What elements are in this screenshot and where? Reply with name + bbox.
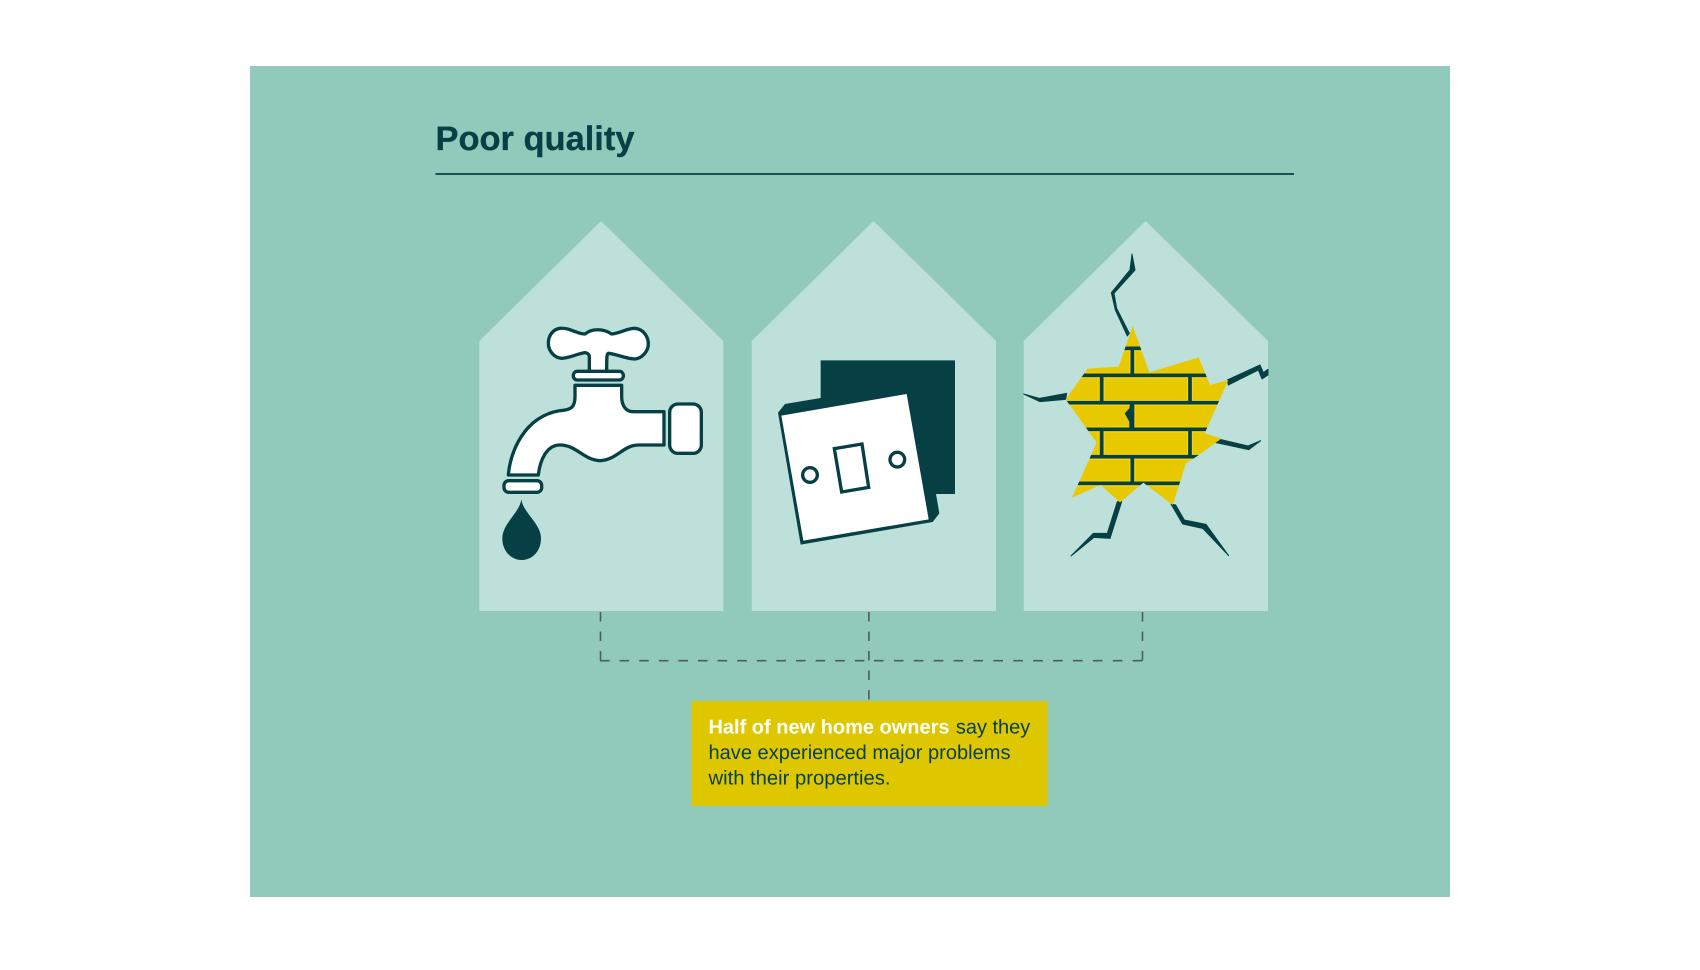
tap handle (548, 328, 648, 373)
tap collar (573, 371, 623, 380)
panel: background (250, 66, 1450, 897)
callout text: have experienced major problems (708, 742, 1010, 764)
switch rocker (834, 444, 869, 492)
icon: dripping tap (502, 328, 701, 560)
right screw (890, 452, 905, 467)
dark wall hole and plate edge (778, 360, 955, 545)
exposed brick area (1060, 323, 1233, 507)
callout text: Half of new home owners (708, 716, 950, 738)
tap body and spout (508, 385, 664, 475)
house shape: cracked wall (1024, 221, 1268, 611)
callout text: say they (956, 716, 1030, 738)
tap end cap (670, 404, 701, 453)
panel: house with loose light switch (752, 221, 996, 611)
spout ring (504, 481, 542, 492)
water drop (502, 499, 541, 560)
callout text (707, 716, 1030, 789)
callout: half of new home owners (692, 701, 1048, 806)
icon: cracked wall with exposed bricks (1024, 254, 1268, 556)
callout text: with their properties. (707, 767, 890, 789)
crack in brick (1125, 403, 1134, 429)
dashed connector lines (600, 612, 1143, 712)
panel: house with cracked wall (1024, 221, 1268, 611)
heading: Poor quality: Poor quality (436, 120, 635, 158)
brick highlights (1066, 350, 1220, 486)
yellow brick fill (1060, 323, 1233, 507)
switch plate (781, 394, 929, 541)
house shape: switch (752, 221, 996, 611)
cracks (1024, 254, 1268, 556)
house shape: tap (479, 221, 723, 611)
panel: house with dripping tap (479, 221, 723, 611)
icon: loose light switch (778, 360, 955, 545)
mortar lines (1060, 348, 1233, 483)
callout box (692, 701, 1048, 806)
left screw (803, 468, 817, 482)
